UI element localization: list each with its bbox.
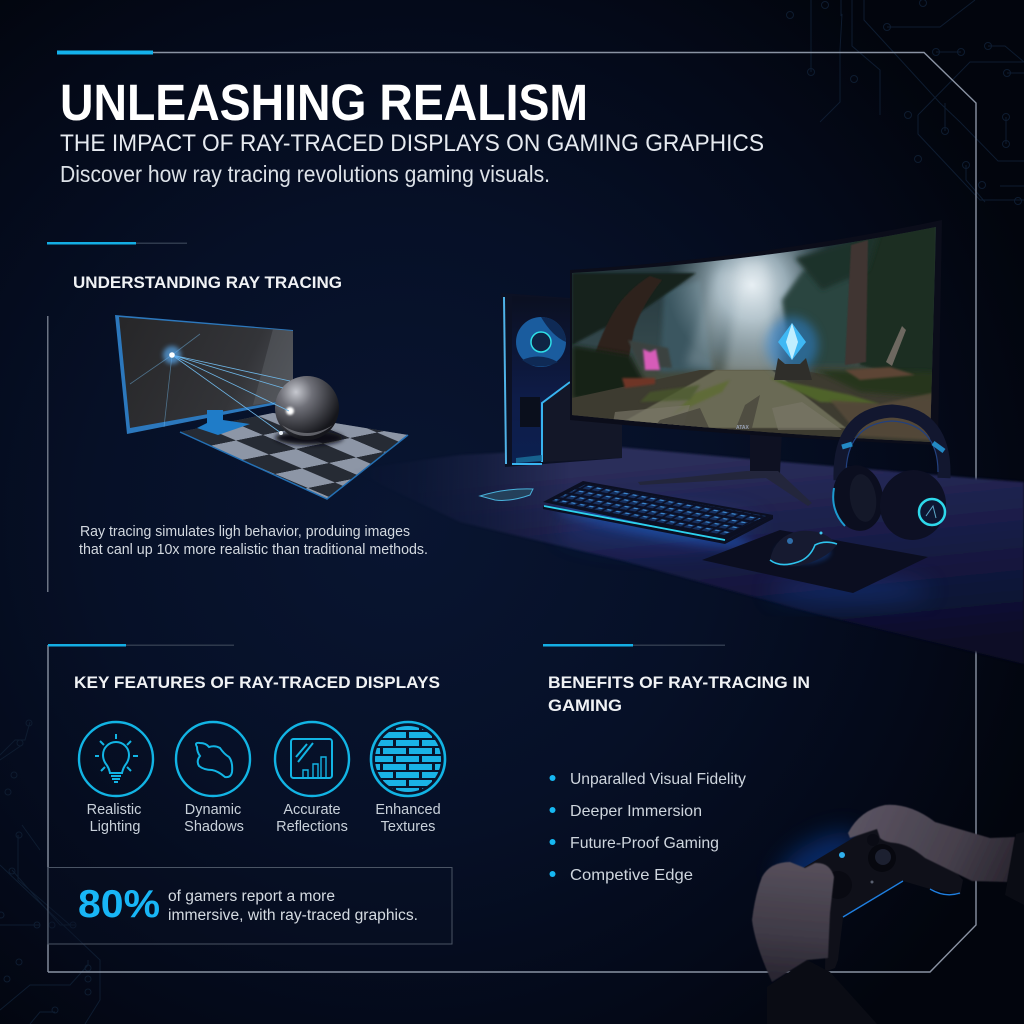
label: enhanced textures: Textures (381, 819, 435, 835)
heading: benefits: GAMING (548, 696, 622, 715)
mouse pad (702, 530, 928, 593)
panel: key features (48, 644, 452, 944)
stat text (168, 888, 418, 924)
benefits list (550, 771, 746, 884)
feature: dynamic shadows (176, 722, 250, 835)
heading: benefits: BENEFITS OF RAY-TRACING IN (548, 673, 810, 692)
label: accurate reflections: Reflections (276, 819, 348, 835)
label: enhanced textures (375, 802, 441, 835)
sphere (275, 376, 343, 445)
body text: that canl up 10x more realistic than traditional methods. (79, 542, 428, 558)
hero illustration: gaming desk setup (350, 220, 1024, 664)
controller (783, 823, 963, 972)
headphones (829, 411, 951, 544)
checkerboard floor (180, 413, 408, 500)
keyboard (543, 481, 773, 556)
body text (79, 524, 428, 558)
title: UNLEASHING REALISM (60, 74, 588, 131)
label: realistic lighting: Lighting (90, 819, 140, 835)
tagline: Discover how ray tracing revolutions gaming visuals. (60, 161, 550, 187)
mouse (770, 531, 837, 566)
feature: enhanced textures (371, 722, 445, 835)
diagram: ray-traced monitor and sphere (115, 315, 415, 505)
panel: benefits (543, 644, 810, 884)
benefits list: Competive Edge (570, 867, 693, 884)
benefits list: Unparalled Visual Fidelity (570, 771, 746, 788)
benefits list: Deeper Immersion (570, 803, 702, 820)
label: realistic lighting (87, 802, 141, 835)
mouse coaster (480, 489, 533, 500)
label: dynamic shadows (184, 802, 244, 835)
heading: key features: KEY FEATURES OF RAY-TRACED DISPLAYS (74, 673, 440, 692)
label: dynamic shadows: Shadows (184, 819, 244, 835)
light source (163, 346, 283, 435)
game scene (565, 220, 945, 445)
label: enhanced textures: Enhanced (375, 802, 441, 818)
icon: shadow blob (176, 722, 250, 796)
stat text: of gamers report a more (168, 888, 335, 905)
near sleeve (767, 960, 877, 1024)
label: accurate reflections: Accurate (283, 802, 341, 818)
heading: understanding ray tracing: UNDERSTANDING RAY TRACING (73, 273, 342, 292)
far sleeve (1005, 832, 1024, 905)
circuit pattern bottom left (0, 720, 100, 1024)
light rays (130, 334, 290, 433)
body text: Ray tracing simulates ligh behavior, produing images (80, 524, 410, 540)
illustration: hands holding game controller (752, 805, 1024, 1024)
circuit pattern top right (786, 0, 1024, 204)
far hand and arm (848, 805, 1015, 882)
desk (436, 446, 1024, 664)
label: accurate reflections (276, 802, 348, 835)
benefits list: Future-Proof Gaming (570, 835, 719, 852)
icon: light bulb (79, 722, 153, 796)
heading: benefits (548, 673, 810, 715)
panel: understanding ray tracing (47, 242, 428, 592)
near hand (752, 862, 834, 982)
monitor logo: ATAX (736, 425, 750, 431)
icon: reflection mirror (275, 722, 349, 796)
subtitle: THE IMPACT OF RAY-TRACED DISPLAYS ON GAMING GRAPHICS (60, 130, 764, 157)
monitor stand (638, 431, 812, 506)
feature: accurate reflections (275, 722, 349, 835)
label: realistic lighting: Realistic (87, 802, 141, 818)
callout: 80 percent stat (48, 868, 452, 944)
feature: realistic lighting (79, 722, 153, 835)
monitor (115, 315, 293, 435)
curved monitor (565, 220, 945, 445)
stat text: immersive, with ray-traced graphics. (168, 907, 418, 924)
controller glow (771, 821, 869, 899)
label: dynamic shadows: Dynamic (185, 802, 241, 818)
icon: brick texture (371, 722, 445, 796)
frame accent bar (57, 50, 153, 54)
PC tower (501, 293, 622, 467)
stat number: 80% (78, 883, 160, 926)
